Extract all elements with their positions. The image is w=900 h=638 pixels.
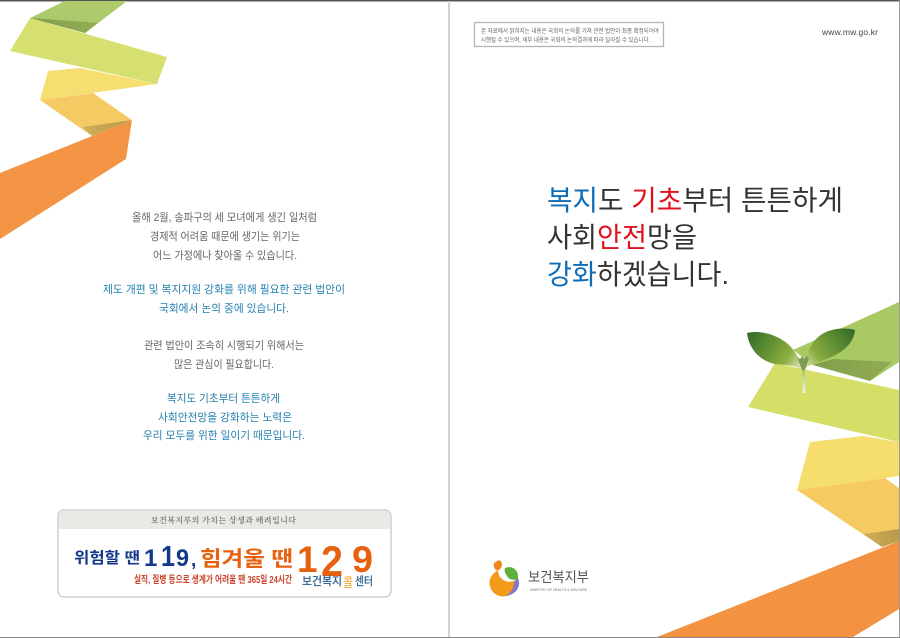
left body text: 어느 가정에나 찾아올 수 있습니다. bbox=[153, 249, 297, 262]
left body text: 제도 개편 및 복지지원 강화를 위해 필요한 관련 법안이 bbox=[103, 282, 345, 296]
logo: ministry of health and welfare: 보건복지부 bbox=[528, 569, 589, 585]
left body text: 복지도 기초부터 튼튼하게 bbox=[167, 391, 280, 405]
main title bbox=[547, 185, 843, 290]
website url: www.mw.go.kr bbox=[821, 27, 878, 37]
left body text: 사회안전망을 강화하는 노력은 bbox=[158, 410, 292, 424]
right ribbon graphic bbox=[657, 302, 899, 637]
left body text: 관련 법안이 조속히 시행되기 위해서는 bbox=[144, 338, 304, 352]
banner: 129 call center: 9 bbox=[176, 545, 189, 572]
left body text bbox=[103, 210, 345, 442]
left ribbon graphic bbox=[0, 1, 167, 239]
left body text: 국회에서 논의 중에 있습니다. bbox=[159, 302, 289, 315]
banner: 129 call center: , bbox=[191, 550, 196, 571]
logo: ministry of health and welfare bbox=[490, 560, 589, 596]
main title: 복지도 기초부터 튼튼하게 bbox=[547, 185, 843, 216]
banner: 129 call center: 1 bbox=[161, 541, 175, 573]
banner: 129 call center: 위험할 땐 bbox=[74, 549, 140, 567]
banner: 129 call center: 실직, 질병 등으로 생계가 어려울 땐 365일 24시간 bbox=[134, 573, 292, 586]
banner: 129 call center: 9 bbox=[352, 539, 373, 580]
left body text: 경제적 어려움 때문에 생기는 위기는 bbox=[150, 230, 300, 243]
banner: 129 call center: 센터 bbox=[355, 575, 373, 588]
banner: 129 call center: 1 bbox=[144, 545, 157, 572]
banner: 129 call center: 1 bbox=[297, 539, 318, 580]
banner: 129 call center: 보건복지 bbox=[302, 575, 342, 588]
left body text: 많은 관심이 필요합니다. bbox=[174, 358, 274, 371]
banner: 129 call center: 콜 bbox=[343, 575, 353, 590]
banner: 129 call center: 2 bbox=[321, 538, 343, 586]
left body text: 우리 모두를 위한 일이기 때문입니다. bbox=[143, 428, 305, 442]
banner: 129 call center bbox=[58, 510, 391, 597]
icon: sprout bbox=[747, 329, 855, 393]
left body text: 올해 2월, 송파구의 세 모녀에게 생긴 일처럼 bbox=[132, 210, 317, 224]
banner: 129 call center: 힘겨울 땐 bbox=[200, 548, 293, 571]
notice box: 시행될 수 있으며, 세부 내용은 국회의 논의결과에 따라 달라질 수 있습니다. bbox=[481, 36, 650, 44]
notice box bbox=[474, 22, 664, 46]
notice box: 본 자료에서 밝혀지는 내용은 국회의 논의를 거쳐 관련 법안이 최종 확정되어야 bbox=[481, 27, 659, 35]
banner: 129 call center: 보건복지부의 가치는 상생과 배려입니다 bbox=[151, 515, 296, 525]
main title: 사회안전망을 bbox=[547, 222, 697, 253]
logo: ministry of health and welfare: MINISTRY OF HEALTH & WELFARE bbox=[530, 587, 587, 592]
main title: 강화하겠습니다. bbox=[547, 259, 729, 290]
